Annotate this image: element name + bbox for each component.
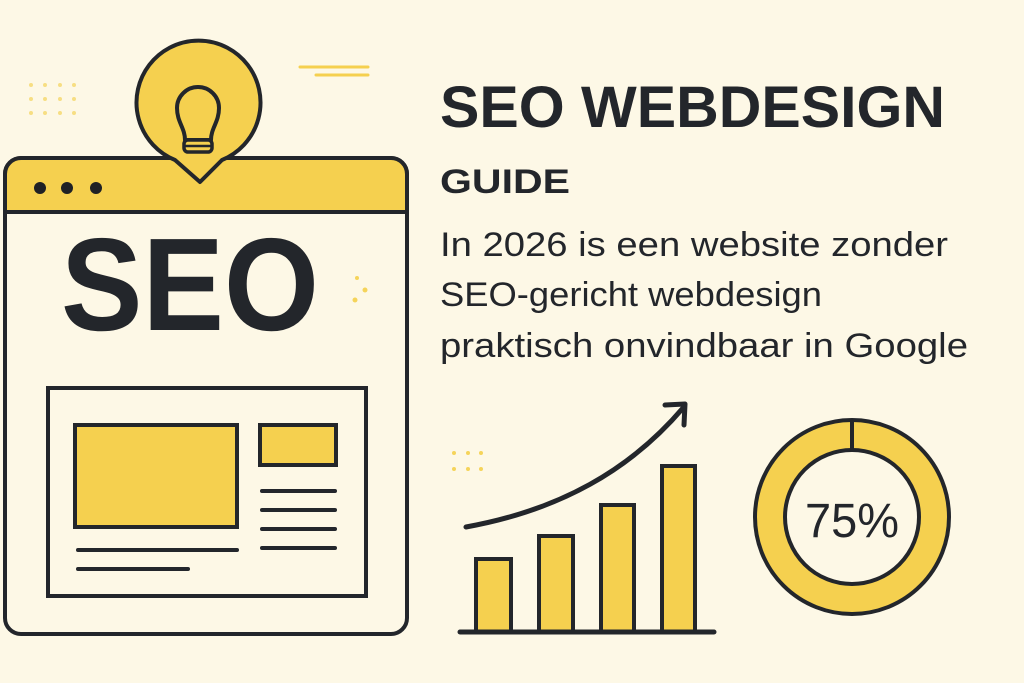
donut chart 75%: 75% bbox=[805, 495, 899, 548]
decorative yellow strokes bbox=[300, 67, 368, 75]
title: SEO WEBDESIGN bbox=[440, 75, 945, 140]
inner content box bbox=[48, 388, 366, 596]
donut chart 75% bbox=[755, 420, 949, 614]
body text: SEO-gericht webdesign bbox=[440, 276, 822, 314]
body text bbox=[440, 226, 968, 365]
icon: lightbulb speech bubble bbox=[136, 41, 261, 182]
SEO heading: SEO bbox=[61, 211, 319, 358]
bar chart with arrow bbox=[460, 404, 714, 632]
decorative dots near SEO bbox=[352, 276, 368, 302]
decorative dots top left bbox=[29, 83, 76, 115]
body text: praktisch onvindbaar in Google bbox=[440, 327, 968, 365]
browser window bbox=[5, 158, 407, 634]
decorative dots near chart bbox=[452, 451, 483, 471]
subtitle: GUIDE bbox=[440, 163, 570, 201]
window dots bbox=[34, 182, 102, 194]
arrow bbox=[466, 408, 683, 527]
body text: In 2026 is een website zonder bbox=[440, 226, 948, 264]
